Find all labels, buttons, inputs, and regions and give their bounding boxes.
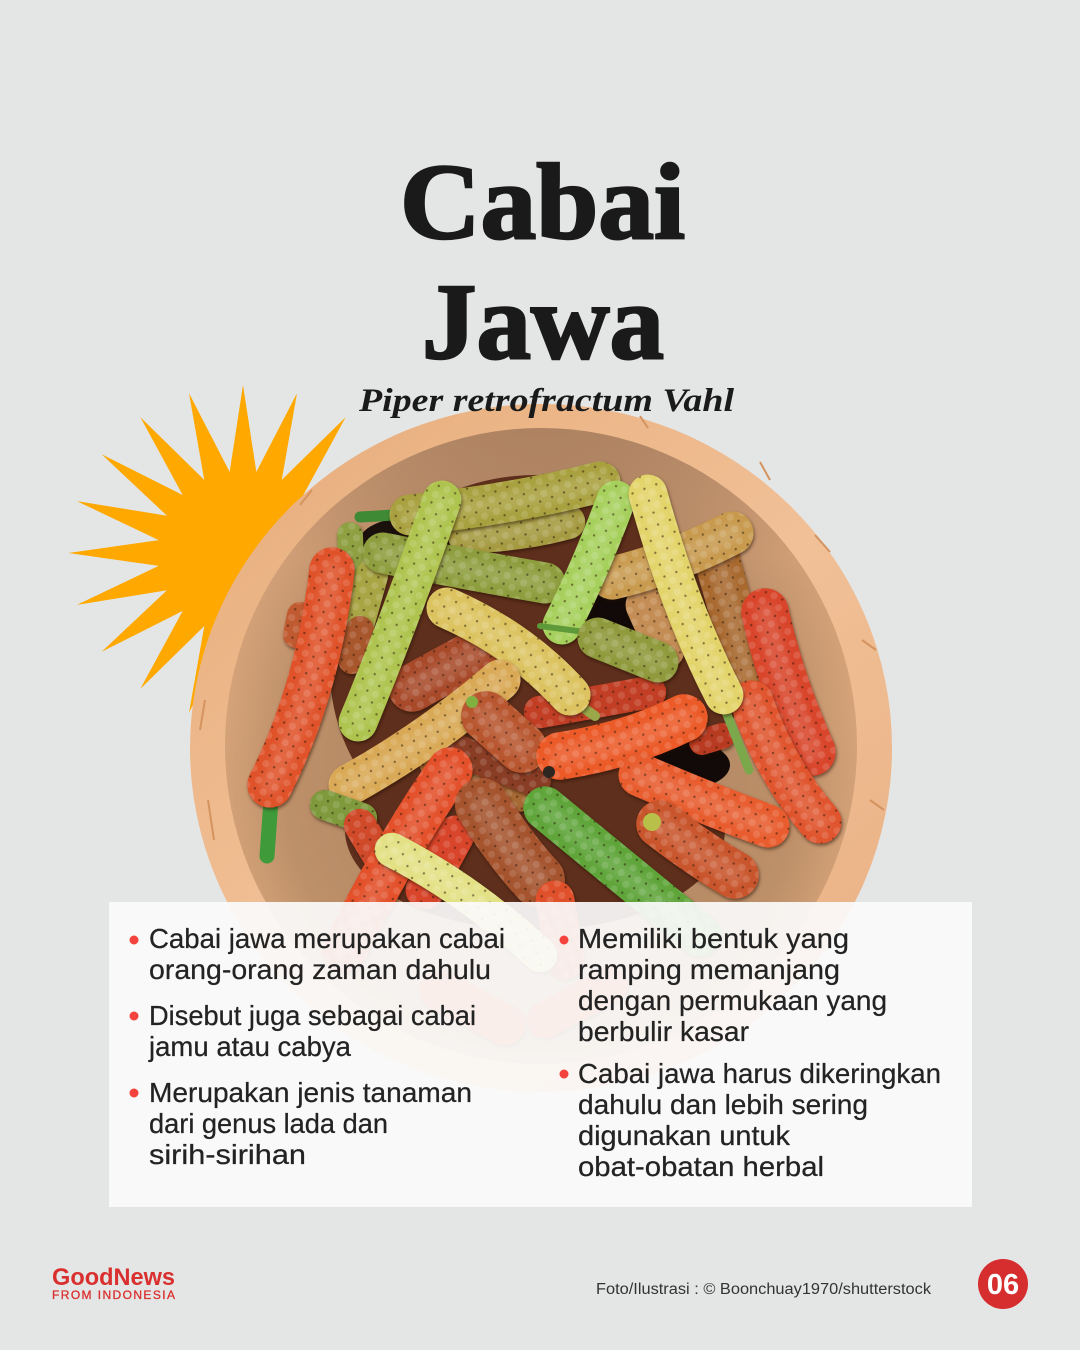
right column facts: ramping memanjang xyxy=(578,954,840,985)
pepper tip details xyxy=(466,696,661,831)
title: Cabai xyxy=(400,143,685,262)
left column facts xyxy=(130,923,505,1170)
peppers xyxy=(267,482,820,1025)
right column facts: digunakan untuk xyxy=(578,1120,791,1151)
title: Jawa xyxy=(422,263,664,382)
stem xyxy=(267,800,271,856)
left column facts: Merupakan jenis tanaman xyxy=(149,1077,472,1108)
left column facts: jamu atau cabya xyxy=(148,1031,351,1062)
left column facts: orang-orang zaman dahulu xyxy=(149,954,491,985)
left column facts: sirih-sirihan xyxy=(149,1139,306,1170)
wooden bowl xyxy=(190,404,892,1092)
stem xyxy=(575,702,595,716)
right column facts: Cabai jawa harus dikeringkan xyxy=(578,1058,941,1089)
photo: wooden bowl of long peppers xyxy=(190,404,892,1092)
stem xyxy=(360,515,395,517)
photo credit: Foto/Ilustrasi : © Boonchuay1970/shutterstock xyxy=(596,1281,931,1298)
panel: facts xyxy=(109,902,972,1207)
left column facts: dari genus lada dan xyxy=(149,1108,388,1139)
icon: orange sunburst xyxy=(68,385,392,717)
logo: GoodNews from Indonesia: FROM INDONESIA xyxy=(52,1288,175,1302)
left column facts: Cabai jawa merupakan cabai xyxy=(149,923,505,954)
stem xyxy=(540,626,585,632)
right column facts: dengan permukaan yang xyxy=(578,985,887,1016)
page number badge: 06 xyxy=(987,1269,1019,1301)
right column facts: berbulir kasar xyxy=(578,1016,749,1047)
right column facts: obat-obatan herbal xyxy=(578,1151,824,1182)
left column facts: Disebut juga sebagai cabai xyxy=(149,1000,476,1031)
logo: GoodNews from Indonesia: GoodNews xyxy=(52,1264,175,1291)
stem xyxy=(726,712,749,770)
page number badge xyxy=(978,1259,1028,1309)
right column facts: dahulu dan lebih sering xyxy=(578,1089,868,1120)
subtitle: scientific name: Piper retrofractum Vahl xyxy=(358,383,735,419)
right column facts: Memiliki bentuk yang xyxy=(578,923,849,954)
right column facts xyxy=(560,923,941,1182)
title xyxy=(400,143,685,382)
